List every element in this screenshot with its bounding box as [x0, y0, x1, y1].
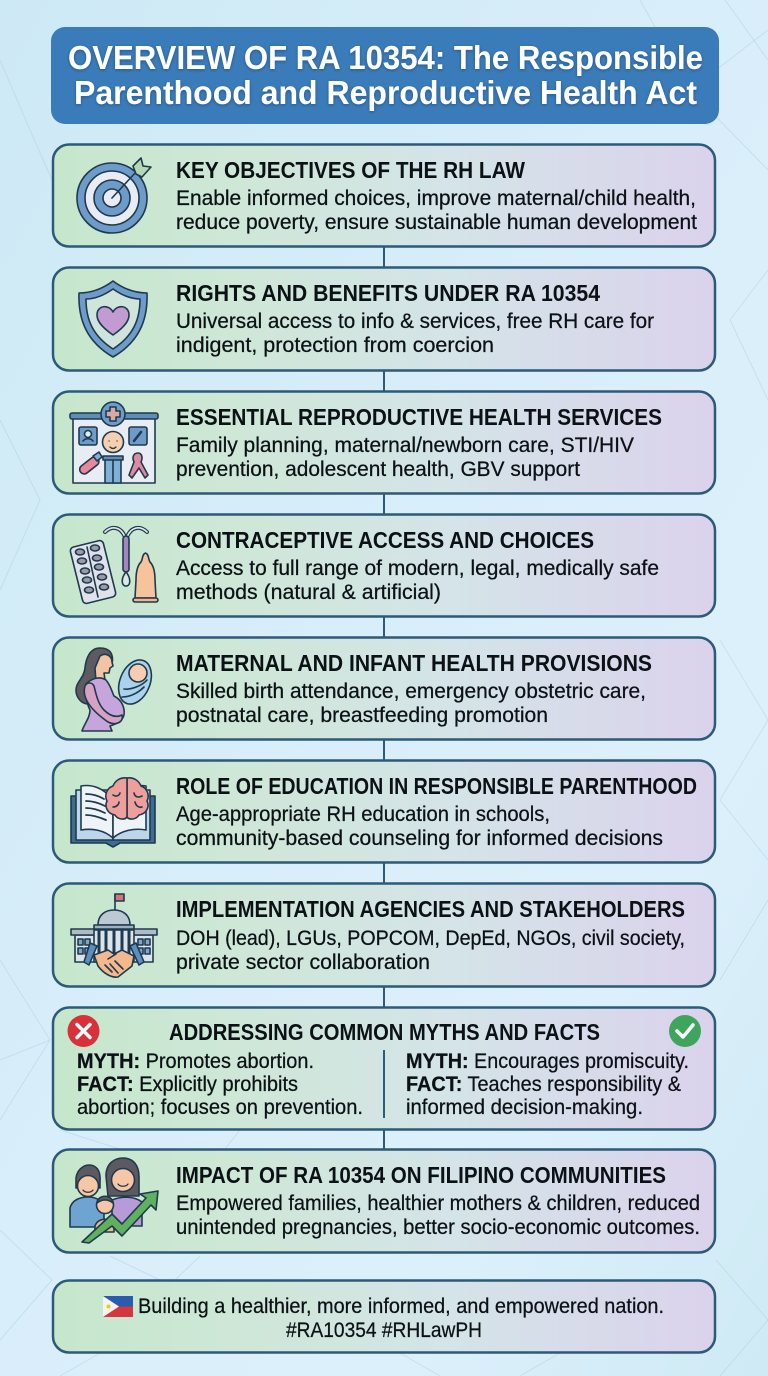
description: private sector collaboration: [176, 950, 430, 974]
description: methods (natural & artificial): [176, 580, 441, 604]
description: DOH (lead), LGUs, POPCOM, DepEd, NGOs, civil society,: [176, 926, 685, 950]
description: indigent, protection from coercion: [176, 333, 494, 357]
description: Skilled birth attendance, emergency obstetric care,: [176, 679, 646, 703]
description: unintended pregnancies, better socio-economic outcomes.: [176, 1215, 700, 1239]
description: [176, 1191, 700, 1239]
myth column right: MYTH: Encourages promiscuity.: [406, 1049, 689, 1073]
icon: red cross: [68, 1015, 100, 1047]
icon: open book with brain: [71, 778, 155, 847]
description: [176, 802, 663, 850]
heading: KEY OBJECTIVES OF THE RH LAW: [176, 157, 525, 183]
icon: pregnant mother: [76, 648, 124, 731]
description: [176, 186, 697, 234]
heading: ESSENTIAL REPRODUCTIVE HEALTH SERVICES: [176, 404, 662, 430]
myth column right: [406, 1049, 689, 1119]
closing text: #RA10354 #RHLawPH: [286, 1318, 482, 1342]
description: [176, 679, 646, 727]
panel: impact on communities: [53, 1150, 715, 1252]
icon: Philippine flag: [103, 1296, 133, 1317]
panel: essential services: [53, 392, 715, 494]
connector line between panels: [383, 247, 385, 1149]
description: Family planning, maternal/newborn care, STI/HIV: [176, 433, 635, 457]
icon: pills, IUD and condom: [69, 528, 158, 604]
myth column left: MYTH: Promotes abortion.: [77, 1049, 314, 1073]
closing text: [138, 1294, 664, 1342]
panel: contraceptive access: [53, 514, 715, 616]
title: [68, 39, 703, 111]
panel: implementation agencies: [53, 884, 715, 986]
icon: shield with heart: [79, 281, 147, 357]
heading: IMPLEMENTATION AGENCIES AND STAKEHOLDERS: [176, 896, 685, 922]
description: community-based counseling for informed decisions: [176, 826, 663, 850]
description: postnatal care, breastfeeding promotion: [176, 703, 548, 727]
description: prevention, adolescent health, GBV support: [176, 457, 580, 481]
panel: closing message: [53, 1280, 715, 1352]
panel: maternal and infant health: [53, 638, 715, 740]
icon: swaddled baby: [112, 655, 158, 709]
myth column right: informed decision-making.: [406, 1095, 643, 1119]
title banner: [51, 27, 719, 124]
heading: ADDRESSING COMMON MYTHS AND FACTS: [169, 1019, 600, 1045]
heading: IMPACT OF RA 10354 ON FILIPINO COMMUNITIES: [176, 1162, 666, 1188]
description: [176, 556, 659, 604]
title: OVERVIEW OF RA 10354: The Responsible: [68, 39, 703, 76]
description: Empowered families, healthier mothers & children, reduced: [176, 1191, 700, 1215]
myth column left: abortion; focuses on prevention.: [77, 1095, 363, 1119]
panel: role of education: [53, 760, 715, 862]
panel: rights and benefits: [53, 268, 715, 370]
description: Enable informed choices, improve maternal/child health,: [176, 186, 696, 210]
description: [176, 926, 685, 974]
myth column left: FACT: Explicitly prohibits: [77, 1072, 298, 1096]
heading: RIGHTS AND BENEFITS UNDER RA 10354: [176, 280, 600, 306]
icon: family with rising arrow: [70, 1158, 158, 1243]
heading: CONTRACEPTIVE ACCESS AND CHOICES: [176, 527, 594, 553]
icon: government building and handshake: [71, 894, 157, 977]
icon: target with arrow: [77, 158, 151, 233]
heading: MATERNAL AND INFANT HEALTH PROVISIONS: [176, 650, 652, 676]
description: [176, 433, 635, 481]
description: Age-appropriate RH education in schools,: [176, 802, 550, 826]
myth column right: FACT: Teaches responsibility &: [406, 1072, 681, 1096]
description: Access to full range of modern, legal, medically safe: [176, 556, 659, 580]
panel: myths and facts: [53, 1008, 715, 1130]
icon: green check: [669, 1015, 701, 1047]
panel: key objectives: [53, 144, 715, 246]
myth column left: [77, 1049, 363, 1119]
description: reduce poverty, ensure sustainable human development: [176, 210, 697, 234]
icon: clinic with services: [70, 402, 158, 483]
title: Parenthood and Reproductive Health Act: [74, 74, 697, 111]
description: Universal access to info & services, free RH care for: [176, 309, 654, 333]
description: [176, 309, 654, 357]
closing text: Building a healthier, more informed, and empowered nation.: [138, 1294, 664, 1318]
